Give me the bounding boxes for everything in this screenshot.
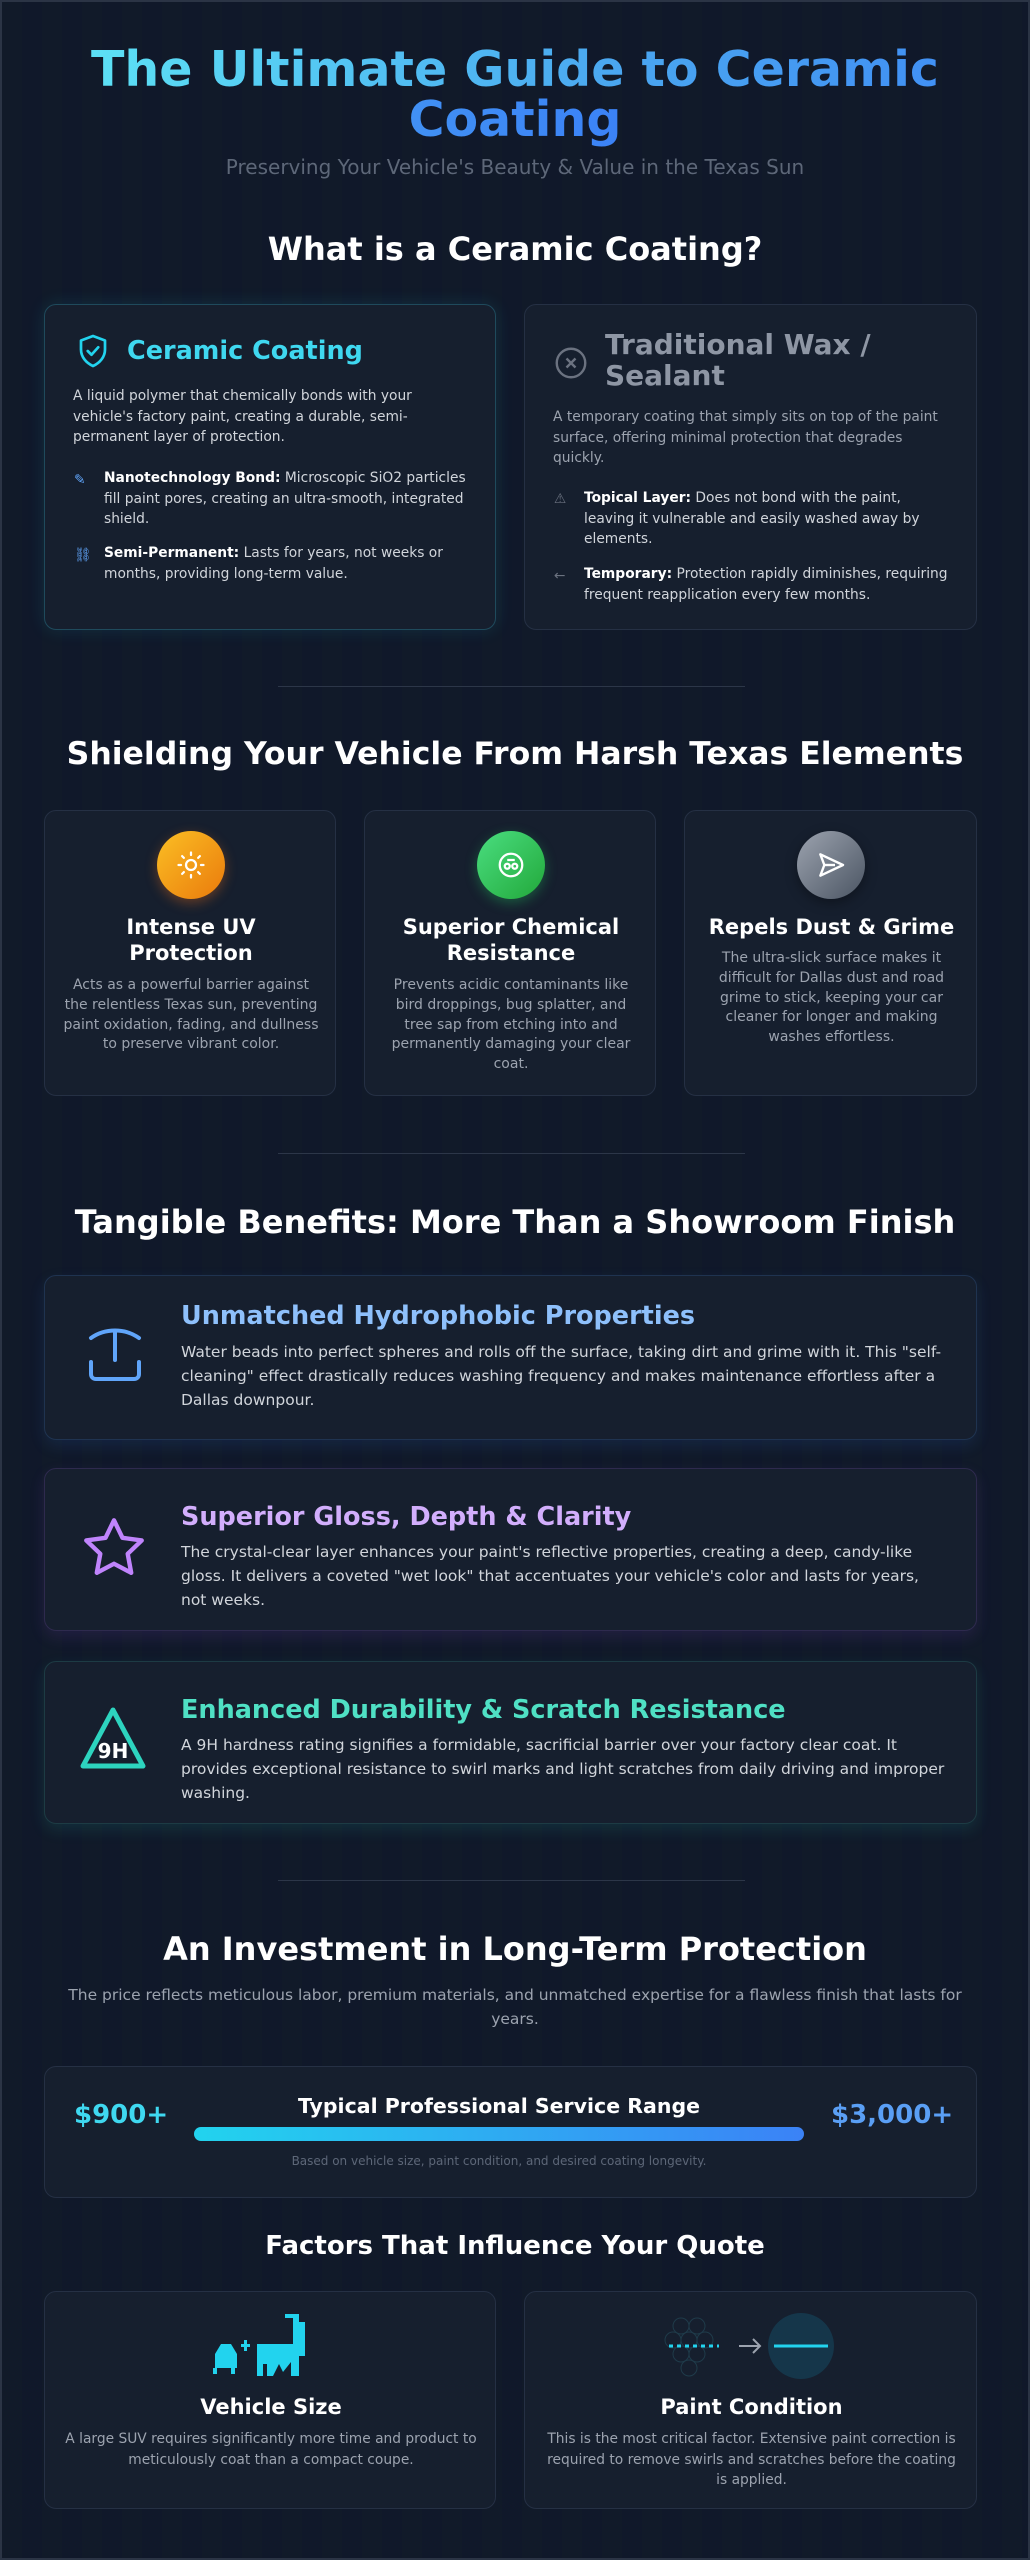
panel: wax: ←: [554, 568, 566, 584]
panel: ceramic coating: ⛓: [74, 547, 92, 563]
panel: vehicle size: [44, 2291, 496, 2509]
icon: vehicles: [213, 2314, 305, 2376]
icon: chemical: [477, 831, 545, 899]
bullet: temporary: Temporary: Protection rapidly diminishes, requiring frequent reapplication every few months.: [584, 566, 948, 602]
panel: UV: [44, 810, 336, 1096]
heading: hydro: Unmatched Hydrophobic Properties: [181, 1301, 695, 1331]
panel: ceramic coating: ✎: [74, 472, 86, 488]
icon: paint correction: [664, 2313, 834, 2379]
icon: 9H: [80, 1708, 146, 1768]
price high: $3,000+: [831, 2100, 953, 2130]
text: A temporary coating that simply sits on top of the paint surface, offering minimal protection that degrades quickly.: [553, 409, 938, 466]
text: This is the most critical factor. Extensive paint correction is required to remove swirls and scratches before the coating is applied.: [547, 2431, 956, 2488]
panel: ceramic coating: [44, 304, 496, 630]
icon: [88, 1328, 142, 1381]
text: hydro: Water beads into perfect spheres and rolls off the surface, taking dirt and grime with it. This "self-cleaning" effect drastically reduces washing frequency and makes maintenance effortless after a Dallas downpour.: [181, 1343, 941, 1409]
text: The ultra-slick surface makes it difficult for Dallas dust and road grime to stick, keeping your car cleaner for longer and making washes effortless.: [719, 950, 944, 1045]
bullet: semi: Semi-Permanent: Lasts for years, not weeks or months, providing long-term value.: [104, 545, 443, 582]
title: Protection: [129, 941, 253, 965]
panel: gloss: [44, 1468, 977, 1631]
price low: $900+: [74, 2100, 168, 2130]
range title: Typical Professional Service Range: [298, 2094, 700, 2118]
icon: plane: [797, 831, 865, 899]
bullet: topical: Topical Layer: Does not bond with the paint, leaving it vulnerable and easily washed away by elements.: [584, 490, 920, 547]
text: A liquid polymer that chemically bonds with your vehicle's factory paint, creating a durable, semi-permanent layer of protection.: [73, 388, 412, 445]
heading: gloss: Superior Gloss, Depth & Clarity: [181, 1502, 631, 1532]
panel: paint condition: [524, 2291, 977, 2509]
text: A large SUV requires significantly more time and product to meticulously coat than a compact coupe.: [65, 2431, 477, 2468]
heading: factors: Factors That Influence Your Quote: [265, 2231, 765, 2261]
heading: shielding: Shielding Your Vehicle From Harsh Texas Elements: [67, 736, 963, 772]
heading: durability: Enhanced Durability & Scratch Resistance: [181, 1695, 786, 1725]
heading: Sealant: [605, 359, 725, 392]
heading: Ceramic Coating: [127, 336, 363, 366]
heading: benefits: Tangible Benefits: More Than a Showroom Finish: [75, 1203, 955, 1241]
title: The Ultimate Guide to Ceramic: [91, 41, 939, 98]
title: Superior Chemical: [403, 915, 619, 939]
title: [91, 41, 939, 148]
icon: sun: [157, 831, 225, 899]
title: Repels Dust & Grime: [709, 915, 954, 939]
title: Vehicle Size: [200, 2395, 342, 2419]
title: [403, 915, 619, 965]
text: investment: The price reflects meticulous labor, premium materials, and unmatched expertise for a flawless finish that lasts for years.: [68, 1986, 962, 2028]
panel: dust: [684, 810, 977, 1096]
icon: star: [84, 1518, 144, 1575]
panel: chemical: [364, 810, 656, 1096]
panel: wax: [524, 304, 977, 630]
text: gloss: The crystal-clear layer enhances your paint's reflective properties, creating a deep, candy-like gloss. It delivers a coveted "wet look" that accentuates your vehicle's color and lasts for years, not weeks.: [181, 1543, 919, 1609]
title: Paint Condition: [660, 2395, 843, 2419]
text: durability: A 9H hardness rating signifies a formidable, sacrificial barrier over your factory clear coat. It provides exceptional resistance to swirl marks and light scratches from daily driving and improper washing.: [181, 1736, 944, 1802]
title: [126, 915, 256, 965]
heading: investment: An Investment in Long-Term Protection: [163, 1930, 867, 1968]
subtitle: Preserving Your Vehicle's Beauty & Value in the Texas Sun: [226, 155, 804, 179]
range bar: [194, 2127, 804, 2141]
heading: what is: What is a Ceramic Coating?: [268, 230, 762, 268]
title: Intense UV: [126, 915, 256, 939]
panel: hydrophobic: [44, 1275, 977, 1440]
heading: [605, 328, 871, 392]
text: Acts as a powerful barrier against the relentless Texas sun, preventing paint oxidation, fading, and dullness to preserve vibrant color.: [63, 977, 318, 1052]
panel: price range: [44, 2066, 977, 2198]
note: Based on vehicle size, paint condition, and desired coating longevity.: [292, 2154, 706, 2168]
heading: Traditional Wax /: [605, 328, 871, 361]
icon: shield: [80, 334, 106, 368]
bullet: nano: Nanotechnology Bond: Microscopic SiO2 particles fill paint pores, creating an ultra-smooth, integrated shield.: [104, 470, 466, 527]
text: Prevents acidic contaminants like bird droppings, bug splatter, and tree sap from etching into and permanently damaging your clear coat.: [392, 977, 630, 1072]
title: Resistance: [447, 941, 575, 965]
icon: 9H: 9H: [98, 1739, 128, 1763]
icon: x: [556, 348, 586, 378]
panel: wax: ⚠: [554, 491, 566, 507]
panel: durability: [44, 1661, 977, 1824]
title: Coating: [409, 91, 621, 148]
